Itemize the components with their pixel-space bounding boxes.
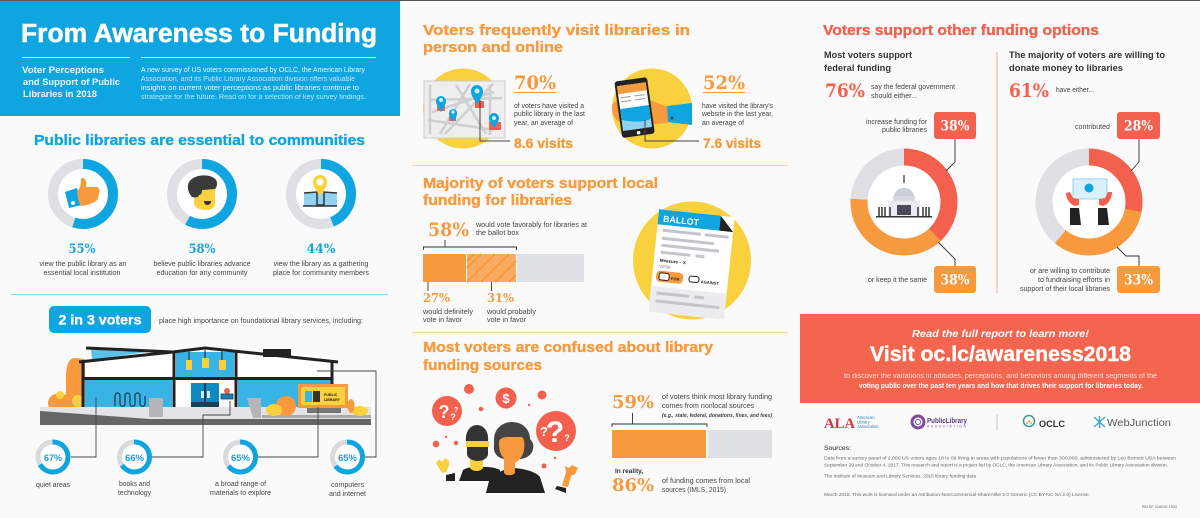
subtitle [22, 65, 120, 100]
sources text: Data from a survey panel of 2,000 US voters ages 18 to 69 living in areas with populations of fewer than 300,000, administered by Leo Burnett USA between [824, 456, 1177, 460]
intro text: insights on current voter perceptions as public libraries continue to [141, 85, 359, 92]
logo: ALA [824, 415, 879, 432]
logos row [824, 414, 1171, 432]
stat 58% [154, 242, 251, 277]
callout 38% increase: increase funding for [866, 119, 928, 126]
stat 70%: year, an average of [514, 120, 573, 127]
call to action description: to discover the variations in attitudes, perceptions, and behaviors among different segments of the [844, 373, 1157, 380]
stat 52%: 52% [703, 73, 745, 94]
stat 44% [273, 242, 369, 277]
ballot illustration: FOR [671, 276, 680, 282]
stat 76%: say the federal government [871, 84, 955, 91]
title: From Awareness to Funding [21, 20, 377, 48]
stat 44%: view the library as a gathering [274, 261, 369, 268]
subtitle: Libraries in 2018 [23, 89, 97, 100]
ring 65% computers and internet [329, 442, 366, 498]
sources text [824, 456, 1177, 509]
stat 31%: would probably [486, 309, 537, 316]
stat 27%: vote in favor [423, 317, 463, 324]
logo: Public Library Association: ASSOCIATION [927, 424, 966, 428]
heading [423, 175, 658, 209]
stat 31% [486, 290, 537, 324]
heading: person and online [423, 39, 563, 56]
stat 55%: view the public library as an [40, 261, 127, 268]
confused voters illustration: $ [502, 391, 510, 406]
logo: Public Library Association: PublicLibrary [927, 416, 968, 425]
logo: ALA: Library [857, 420, 871, 424]
sources heading: Sources: [824, 445, 851, 452]
stat 86%: sources (IMLS, 2015) [662, 487, 726, 494]
logo: Public Library Association [912, 416, 968, 428]
stat 61%: 61% [1009, 80, 1049, 102]
subtitle: Voter Perceptions [22, 65, 104, 76]
ring 66% books and technology: 66% [125, 453, 145, 464]
heading: Voters support other funding options [823, 22, 1099, 39]
stat 58%: the ballot box [476, 230, 520, 237]
stat 70% [514, 73, 585, 151]
ballot illustration: AGAINST [701, 279, 720, 286]
stat 86% [612, 468, 750, 496]
ring 65% computers and internet: and internet [329, 491, 366, 498]
callout 33% fundraising: support of their local libraries [1020, 286, 1110, 293]
logo: ALA: ALA [824, 416, 855, 432]
panel: header banner [0, 1, 400, 116]
ring 65% computers and internet: 65% [338, 453, 358, 464]
stat 58%: would vote favorably for libraries at [475, 222, 587, 229]
stat 70%: of voters have visited a [514, 103, 584, 110]
confused voters illustration: ? [546, 416, 564, 449]
stat 52%: have visited the library's [702, 103, 773, 110]
confused voters illustration: ? [450, 412, 456, 422]
stat 76% [825, 80, 955, 102]
stat 52%: 7.6 visits [703, 135, 761, 151]
callout 33% fundraising [1020, 247, 1160, 293]
stat 52%: website in the last year, [701, 111, 773, 118]
stat 27% [422, 290, 474, 324]
badge: 2 in 3 voters [58, 312, 142, 328]
callout 38% increase: public libraries [882, 127, 927, 134]
stat 70%: public library in the last [514, 111, 585, 118]
heading: Most voters are confused about library [423, 339, 714, 356]
heading [423, 22, 690, 56]
callout 38% increase: 38% [940, 118, 970, 134]
ballot illustration: Measure – X [660, 258, 686, 265]
sources text: RM SP 216028 1803 [1142, 505, 1177, 509]
callout 38% keep [868, 242, 976, 293]
ring 66% books and technology: books and [119, 481, 150, 488]
ring 65% broad range of materials: materials to explore [210, 490, 271, 497]
callout 33% fundraising: or are willing to contribute [1030, 268, 1110, 275]
stat 76%: 76% [825, 80, 865, 102]
ring 66% books and technology: technology [118, 490, 151, 497]
map illustration [423, 68, 510, 148]
stacked bar [423, 240, 584, 291]
donut 55% with thumbs up icon [53, 164, 113, 224]
stat 44%: place for community members [273, 270, 369, 277]
logo: OCLC: OCLC [1039, 419, 1065, 430]
panel: public libraries essential [34, 132, 369, 277]
ballot illustration [633, 202, 751, 320]
intro text [141, 67, 366, 101]
library building illustration: LIBRARY [324, 398, 340, 402]
stat 76%: should either... [871, 93, 917, 100]
stat 59%: comes from nonlocal sources [662, 403, 754, 410]
heading: funding for libraries [423, 192, 572, 209]
ring 65% broad range of materials: a broad range of [215, 481, 266, 488]
callout 33% fundraising: to fundraising efforts in [1038, 277, 1110, 284]
confused voters illustration [432, 384, 578, 493]
stat 31%: 31% [487, 290, 514, 305]
callout 33% fundraising: 33% [1124, 272, 1153, 288]
logo: ALA: Association [857, 424, 879, 429]
heading: Voters frequently visit libraries in [423, 22, 690, 39]
federal funding subheading: federal funding [824, 63, 891, 74]
stat 70%: 70% [514, 73, 556, 94]
callout 38% keep: or keep it the same [868, 277, 927, 284]
connector lines [71, 371, 376, 457]
panel: call to action [800, 314, 1200, 403]
stat 86%: In reality, [615, 468, 643, 475]
stat 70%: 8.6 visits [514, 135, 573, 151]
donate subheading: The majority of voters are willing to [1009, 50, 1165, 61]
stat 59%: 59% [612, 392, 654, 413]
confused voters illustration: ? [540, 424, 548, 439]
heading: funding sources [423, 357, 542, 374]
library building illustration: PUBLIC [324, 393, 338, 397]
ring 65% computers and internet: computers [331, 482, 364, 489]
badge caption: place high importance on foundational library services, including: [159, 318, 363, 325]
panel: funding sources confusion [423, 339, 772, 496]
callout 28% contributed [1075, 112, 1160, 171]
call to action url: Visit oc.lc/awareness2018 [870, 343, 1131, 366]
confused voters illustration: ? [564, 433, 570, 443]
phone illustration [612, 68, 699, 148]
panel: local funding [422, 175, 751, 324]
confused voters illustration: ? [438, 402, 450, 422]
call to action description [844, 373, 1157, 390]
logo: WebJunction [1094, 416, 1171, 429]
callout 38% increase [866, 112, 976, 171]
stat 61% [1009, 80, 1094, 102]
stat 61%: have either... [1056, 87, 1094, 94]
federal funding subheading: Most voters support [824, 50, 913, 61]
donut 44% with library pin icon [291, 164, 351, 224]
stat 59% [612, 392, 772, 419]
intro text: strategize for the future. Read on for a selection of key survey findings. [141, 94, 366, 101]
stat 31%: vote in favor [487, 317, 527, 324]
sources text: The Institute of Museum and Library Services, 2015 library funding data [824, 474, 977, 478]
panel: voters visit libraries [423, 22, 773, 151]
stat 86%: of funding comes from local [662, 478, 750, 485]
subtitle: and Support of Public [23, 77, 120, 88]
heading [423, 339, 714, 374]
sources text: September 29 and October 4, 2017. This research and report is a project led by OCLC, the American Library Association, and its Public Library Association division. [824, 462, 1168, 468]
stat 52%: an average of [702, 120, 744, 127]
stat 27%: 27% [423, 290, 450, 305]
donut 58% with face icon [172, 164, 232, 224]
stat 58%: 58% [188, 242, 216, 257]
sources block [824, 445, 1177, 509]
stat 52% [701, 73, 773, 151]
stat 58%: believe public libraries advance [154, 261, 251, 268]
donate donut with money icon [1044, 157, 1134, 247]
ring 67% quiet areas: 67% [44, 453, 63, 464]
heading: Majority of voters support local [423, 175, 658, 192]
confused voters illustration: ? [454, 407, 458, 414]
stat 27%: would definitely [422, 309, 474, 316]
intro text: Association, and its Public Library Association division offers valuable [141, 76, 355, 83]
stat 55% [40, 242, 127, 277]
call to action lead: Read the full report to learn more! [912, 328, 1090, 340]
heading: Public libraries are essential to communities [34, 132, 365, 149]
stat 59%: of voters think most library funding [662, 394, 772, 401]
donate subheading: donate money to libraries [1009, 63, 1123, 74]
federal donut with capitol icon [859, 157, 949, 247]
panel: 2 in 3 voters [36, 306, 376, 498]
panel: other funding options [823, 22, 1165, 293]
stat 58% [428, 219, 587, 241]
federal funding subheading [824, 50, 913, 74]
library building illustration [40, 348, 371, 425]
stat 58%: 58% [428, 219, 469, 241]
donate subheading [1009, 50, 1165, 74]
callout 38% keep: 38% [940, 272, 970, 288]
ring 67% quiet areas: quiet areas [36, 482, 70, 489]
stat 44%: 44% [306, 242, 336, 257]
ring 65% broad range of materials [210, 442, 271, 497]
call to action description: voting public over the past ten years and how that drives their support for libraries today. [859, 383, 1143, 390]
ring 67% quiet areas [36, 442, 70, 489]
stat 55%: essential local institution [44, 270, 121, 277]
ballot illustration: BALLOT [663, 214, 700, 228]
stat 58%: education for any community [156, 270, 248, 277]
callout 28% contributed: contributed [1075, 124, 1110, 131]
ring 66% books and technology [118, 442, 151, 497]
ballot illustration: VOTE: [659, 264, 671, 270]
callout 28% contributed: 28% [1124, 118, 1153, 134]
logo: OCLC [1024, 416, 1065, 430]
sources text: March 2018. This work is licensed under an Attribution-NonCommercial-ShareAlike 2.0 Generic (CC BY-NC-SA 2.0) License. [824, 492, 1090, 497]
logo: WebJunction: WebJunction [1107, 418, 1171, 429]
stat 55%: 55% [68, 242, 96, 257]
badge [49, 306, 151, 333]
logo: ALA: American [857, 415, 875, 420]
stat 86%: 86% [612, 475, 654, 496]
funding bar [612, 413, 772, 458]
stat 59%: (e.g., state, federal, donations, fines, and fees) [662, 413, 772, 419]
intro text: A new survey of US voters commissioned by OCLC, the American Library [141, 67, 365, 74]
ring 65% broad range of materials: 65% [231, 453, 251, 464]
